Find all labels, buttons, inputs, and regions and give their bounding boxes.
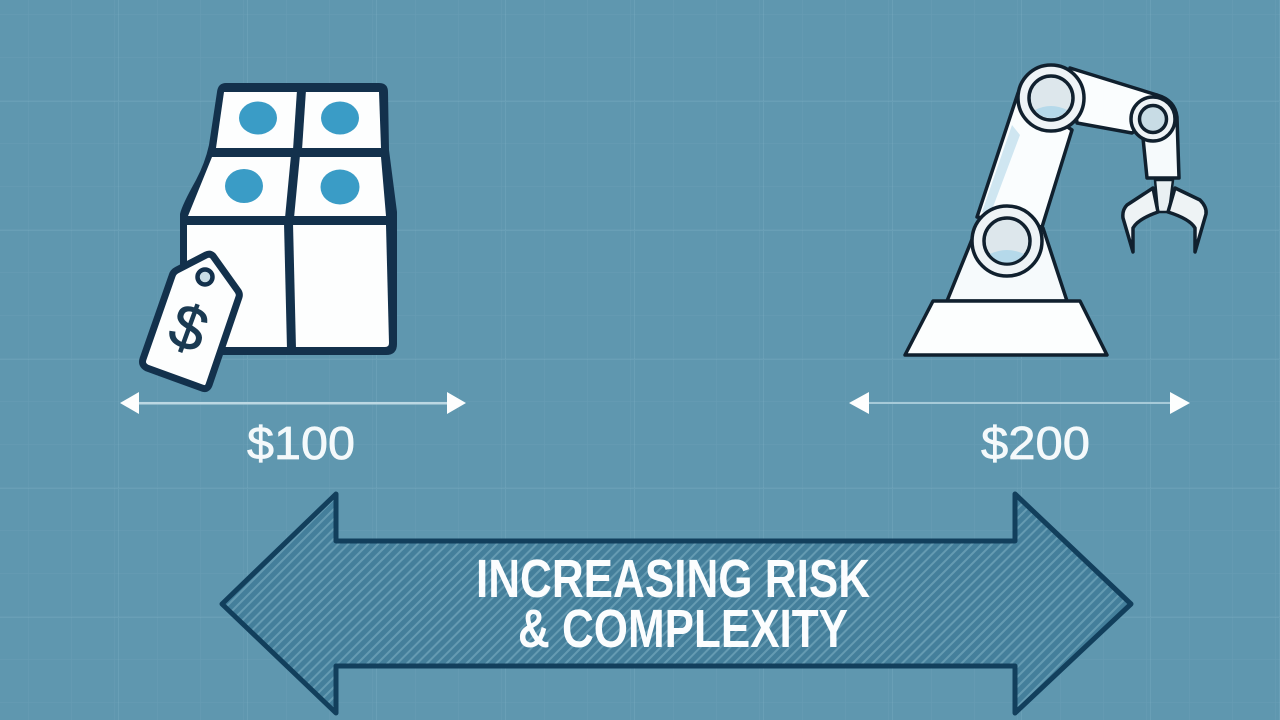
robot lower joint [972,206,1042,276]
robot gripper [1123,180,1206,252]
robot top joint [1018,65,1084,131]
arrow label line 1: INCREASING RISK [476,549,870,609]
robot base [905,301,1107,355]
price label: $200: $200 [981,417,1090,469]
robot lower arm [977,93,1072,227]
robot upper arm [1070,68,1170,133]
robot forearm [1143,95,1179,178]
arrow: width marker for $200 [849,392,1190,414]
price label: $100: $100 [247,417,355,469]
icon: price tag [142,254,239,389]
arrow: width marker for $100 [120,392,466,414]
robot wrist joint [1131,97,1175,141]
arrow label line 2: & COMPLEXITY [518,599,848,659]
icon: robotic arm [905,65,1206,355]
double-headed arrow: increasing risk and complexity [222,494,1131,713]
icon: box of goods with price tag [142,83,397,389]
robot upper arm seam cover [1148,99,1172,122]
icon: price tag: $ [160,290,216,367]
robot lower arm shadow [982,125,1020,215]
robot pedestal [947,228,1067,301]
